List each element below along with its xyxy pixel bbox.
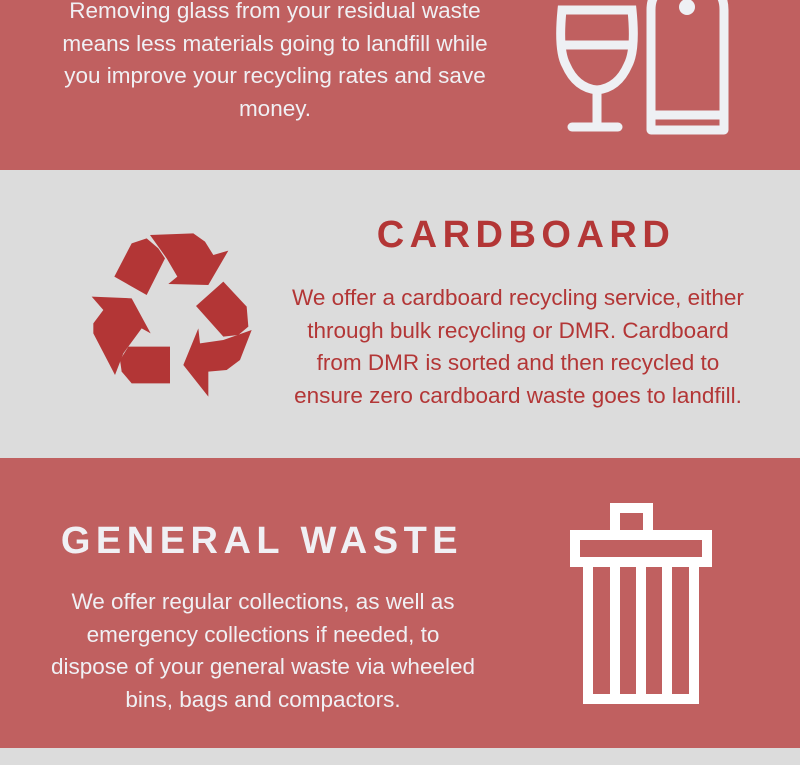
heading: general waste: GENERAL WASTE [61,520,463,562]
general waste text: dispose of your general waste via wheeled [51,654,475,679]
cardboard text: from DMR is sorted and then recycled to [317,350,719,375]
cardboard text: We offer a cardboard recycling service, either [292,285,744,310]
glass text: means less materials going to landfill while [62,30,488,56]
glass text [62,0,488,120]
cardboard text [292,285,744,408]
icon: glass and bottle [556,0,728,134]
panel: glass [0,0,800,170]
general waste text [51,589,475,712]
cardboard text: through bulk recycling or DMR. Cardboard [307,318,729,342]
glass text: you improve your recycling rates and save [64,63,486,88]
icon: bin [570,503,712,704]
cardboard text: ensure zero cardboard waste goes to landfill. [294,382,742,408]
icon: recycle [92,233,252,396]
panel: cardboard [0,170,800,458]
general waste text: We offer regular collections, as well as [71,589,455,614]
glass text: money. [239,96,311,120]
general waste text: emergency collections if needed, to [87,622,439,646]
general waste text: bins, bags and compactors. [125,686,401,712]
panel: general waste [0,458,800,748]
heading: cardboard: CARDBOARD [377,214,675,256]
